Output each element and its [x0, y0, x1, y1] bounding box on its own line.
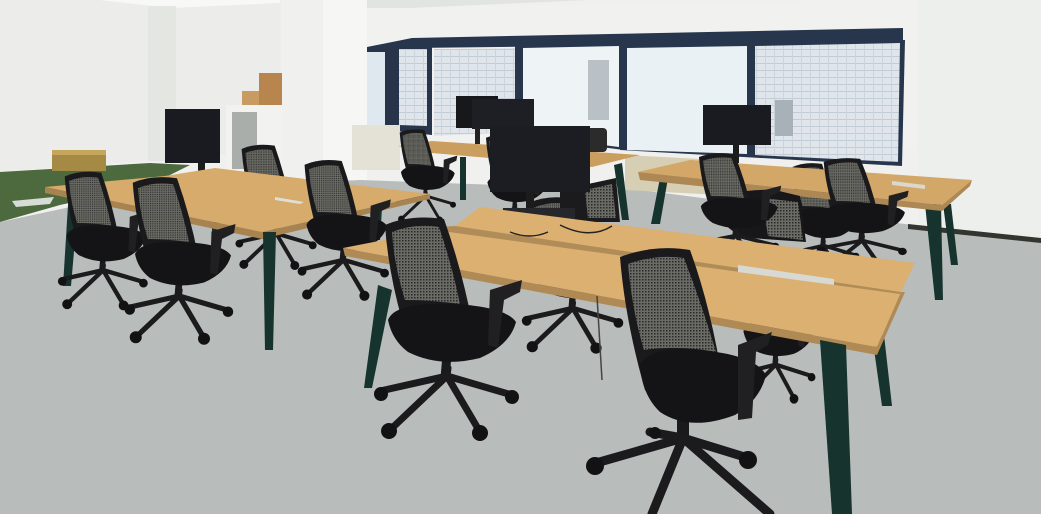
back chair window side [585, 128, 607, 152]
left wall [0, 0, 282, 172]
centre monitor [490, 126, 590, 232]
centre desk cables [510, 225, 612, 236]
floor [0, 180, 1041, 514]
chair left far [58, 172, 150, 310]
upper window wall [367, 0, 920, 150]
right monitor [703, 105, 771, 163]
front chair left [374, 217, 522, 441]
window band [367, 28, 905, 166]
left monitor [165, 109, 222, 181]
front chair right [586, 248, 772, 514]
chair behind left table [235, 145, 318, 270]
front table [343, 207, 915, 514]
chair left right side [298, 160, 391, 301]
back chair left [395, 129, 457, 223]
left partition [148, 6, 176, 161]
chair at right table left [692, 153, 781, 269]
stacked boxes on cabinet [242, 73, 282, 105]
chair left near [124, 177, 236, 345]
right table [638, 160, 972, 300]
middle back table [398, 141, 640, 220]
right table back chair [787, 163, 861, 279]
chair at right table front [817, 158, 909, 274]
chair behind front table right [736, 269, 817, 404]
chair facing away at right table [716, 190, 806, 242]
cable hanging [597, 296, 602, 380]
chair behind front table centre [522, 197, 625, 354]
back monitors [456, 96, 534, 144]
skirting [908, 224, 1041, 243]
right wall [918, 0, 1041, 238]
low cabinet by column [352, 125, 400, 170]
back chair middle [481, 134, 550, 239]
cardboard boxes [52, 150, 106, 171]
green carpet [0, 163, 190, 222]
left table [45, 168, 430, 350]
left table legs behind [63, 205, 382, 286]
chair back behind centre monitor [560, 178, 620, 222]
beige wall under window [625, 155, 720, 195]
ceiling [100, 0, 280, 8]
column [281, 0, 367, 182]
mat on carpet [12, 197, 54, 207]
ceiling light [367, 0, 590, 8]
white cabinet [226, 105, 282, 170]
